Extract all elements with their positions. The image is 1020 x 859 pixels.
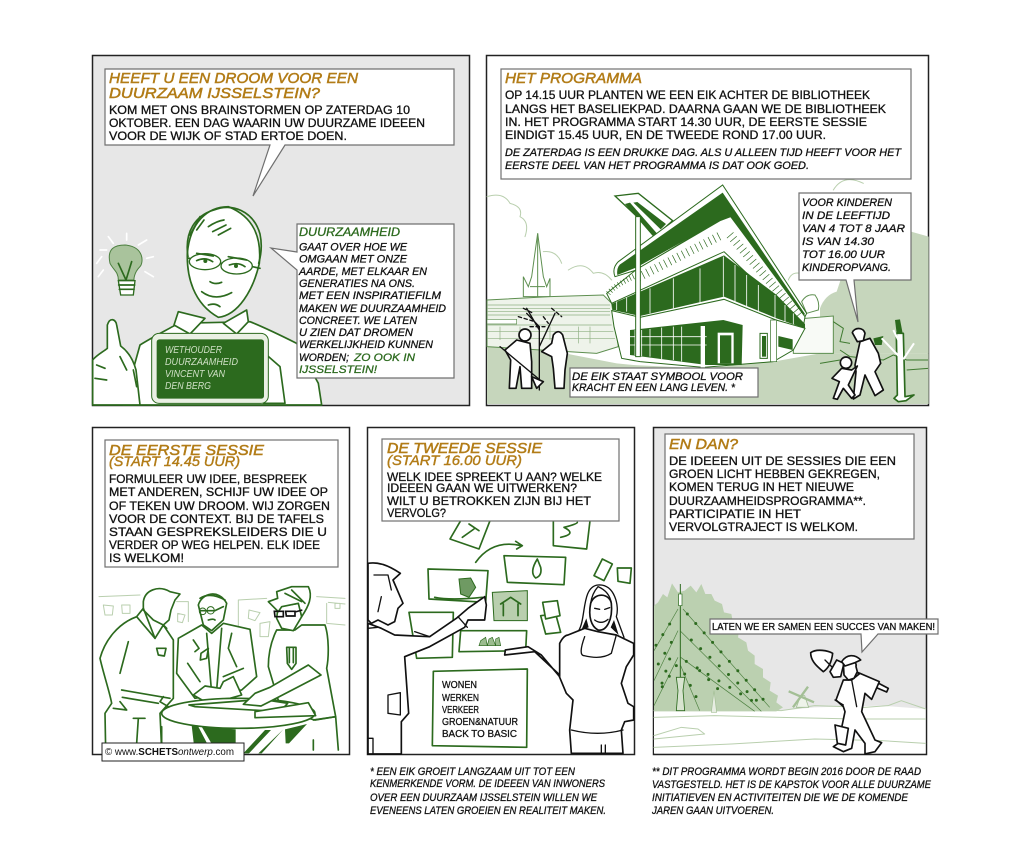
credit: schetsontwerp xyxy=(102,743,244,761)
speech bubble: programma xyxy=(501,69,911,179)
text: eik symbool xyxy=(572,371,743,394)
text: eik symbool: KRACHT EN EEN LANG LEVEN. * xyxy=(572,382,736,394)
text: kinderopvang: IN DE LEEFTIJD xyxy=(802,210,890,222)
planted oak tree xyxy=(518,308,562,390)
heading: de tweede sessie: (START 16.00 UUR) xyxy=(387,453,522,468)
people planting tree xyxy=(500,329,567,388)
text: en dan body: DUURZAAMHEIDSPROGRAMMA**. xyxy=(669,494,866,508)
text: en dan body: DE IDEEEN UIT DE SESSIES DIE EEN xyxy=(669,454,896,468)
list: themes: BACK TO BASIC xyxy=(442,728,517,740)
list: themes: WERKEN xyxy=(442,692,479,704)
text: kinderopvang xyxy=(802,197,905,274)
text: programma body: IN. HET PROGRAMMA START 14.30 UUR, DE EERSTE SESSIE xyxy=(505,115,867,129)
church xyxy=(523,233,550,297)
tablet label: wethouder: DEN BERG xyxy=(165,380,211,392)
text: invitation xyxy=(109,103,425,143)
illustration: pointing man xyxy=(368,563,486,754)
speech bubble: tweede sessie xyxy=(382,439,619,521)
text: kinderopvang: VOOR KINDEREN xyxy=(802,197,892,209)
illustration: three people around a table xyxy=(99,587,345,753)
speech bubble: samen een succes xyxy=(710,619,938,652)
text: en dan body: GROEN LICHT HEBBEN GEKREGEN, xyxy=(669,467,880,481)
text: eerste sessie body: MET ANDEREN, SCHIJF UW IDEE OP xyxy=(109,485,328,499)
text: duurzaamheid definition: MET EEN INSPIRATIEFILM xyxy=(299,290,442,302)
text: duurzaamheid definition: WORDEN; xyxy=(299,352,349,364)
heading: heeft u een droom: HEEFT U EEN DROOM VOOR EEN xyxy=(109,70,358,87)
list: themes: GROEN&NATUUR xyxy=(442,716,518,728)
library roof xyxy=(614,185,807,320)
text: invitation: KOM MET ONS BRAINSTORMEN OP ZATERDAG 10 xyxy=(109,103,410,117)
text: duurzaamheid definition: CONCREET. WE LATEN xyxy=(299,315,417,327)
text: en dan body xyxy=(669,454,896,534)
heading: de eerste sessie: (START 14.45 UUR) xyxy=(109,454,240,469)
illustration: woman presenting xyxy=(505,585,634,753)
text: eerste sessie body: IS WELKOM! xyxy=(109,551,184,565)
panel: heeft u een droom xyxy=(92,56,470,406)
speech bubble: invitation xyxy=(105,69,454,196)
text: kinderopvang: KINDEROPVANG. xyxy=(802,262,891,274)
text: duurzaamheid definition xyxy=(298,227,446,376)
panel: en dan xyxy=(654,428,938,754)
text: tweede sessie body: WILT U BETROKKEN ZIJN BIJ HET xyxy=(387,494,592,508)
tablet label: wethouder: DUURZAAMHEID xyxy=(165,356,238,368)
footnote: eik: KENMERKENDE VORM. DE IDEEEN VAN INWONERS xyxy=(370,778,606,790)
text: duurzaamheid definition: WERKELIJKHEID KUNNEN xyxy=(299,339,433,351)
text: duurzaamheid definition: ZO OOK IN xyxy=(353,352,415,364)
footnote: duurzaamheidsprogramma: VASTGESTELD. HET IS DE KAPSTOK VOOR ALLE DUURZAME xyxy=(652,779,932,791)
text: eerste sessie body: VOOR DE CONTEXT. BIJ DE TAFELS xyxy=(109,512,324,526)
text: duurzaamheid definition: OMGAAN MET ONZE xyxy=(299,254,408,266)
heading: de tweede sessie: DE TWEEDE SESSIE xyxy=(387,440,543,457)
speech bubble: duurzaamheid xyxy=(271,224,454,378)
text: programma body: EERSTE DEEL VAN HET PROGRAMMA IS DAT OOK GOED. xyxy=(505,160,809,172)
rear building and trees xyxy=(793,295,833,353)
text: programma body xyxy=(505,88,902,172)
tablet label: wethouder: WETHOUDER xyxy=(165,344,222,356)
text: eerste sessie body xyxy=(109,472,330,565)
library lower windows xyxy=(630,320,793,367)
text: duurzaamheid definition: U ZIEN DAT DROMEN xyxy=(299,327,413,339)
text: duurzaamheid definition: GENERATIES NA ONS. xyxy=(299,278,415,290)
text: tweede sessie body: VERVOLG? xyxy=(387,506,446,520)
icon: windmill xyxy=(789,687,814,707)
text: en dan body: PARTICIPATIE IN HET xyxy=(669,507,802,521)
icon: light bulb xyxy=(97,233,153,295)
heading: de eerste sessie xyxy=(109,442,265,469)
illustration: walking parent, child and young tree xyxy=(820,319,928,402)
illustration: wall of ideas with two people xyxy=(409,521,631,747)
text: samen een succes: LATEN WE ER SAMEN EEN SUCCES VAN MAKEN! xyxy=(712,621,935,633)
text: eik symbool: DE EIK STAAT SYMBOOL VOOR xyxy=(572,371,743,383)
heading: en dan: EN DAN? xyxy=(669,436,739,453)
footnote: eik xyxy=(370,766,606,817)
heading: de eerste sessie: DE EERSTE SESSIE xyxy=(109,442,265,459)
text: tweede sessie body: IDEEEN GAAN WE UITWERKEN? xyxy=(387,481,577,495)
text: programma body: DE ZATERDAG IS EEN DRUKKE DAG. ALS U ALLEEN TIJD HEEFT VOOR HET xyxy=(505,147,902,159)
text: tweede sessie body xyxy=(387,470,602,520)
text: programma body: LANGS HET BASELIEKPAD. DAARNA GAAN WE DE BIBLIOTHEEK xyxy=(505,102,886,116)
panel: het programma xyxy=(486,56,929,406)
panel: de eerste sessie xyxy=(92,428,350,761)
footnote: eik: * EEN EIK GROEIT LANGZAAM UIT TOT EEN xyxy=(370,766,575,778)
illustration: landscape with growing tree xyxy=(654,583,926,753)
text: programma body: OP 14.15 UUR PLANTEN WE EEN EIK ACHTER DE BIBLIOTHEEK xyxy=(505,88,870,102)
tablet label: wethouder: VINCENT VAN xyxy=(165,368,225,380)
list: themes xyxy=(442,679,518,740)
tablet label: wethouder xyxy=(165,344,238,392)
list: themes: WONEN xyxy=(442,679,477,691)
heading: de tweede sessie xyxy=(387,440,543,468)
text: tweede sessie body: WELK IDEE SPREEKT U AAN? WELKE xyxy=(387,470,602,484)
lamp post xyxy=(636,217,640,357)
footnote: duurzaamheidsprogramma xyxy=(651,766,932,817)
illustration: tree branch lights xyxy=(654,584,770,712)
text: invitation: OKTOBER. EEN DAG WAARIN UW DUURZAME IDEEEN xyxy=(109,116,425,130)
text: programma body: EINDIGT 15.45 UUR, EN DE TWEEDE ROND 17.00 UUR. xyxy=(505,128,826,142)
library fin xyxy=(615,193,673,237)
text: kinderopvang: IS VAN 14.30 xyxy=(802,236,875,248)
speech bubble: en dan xyxy=(665,434,914,539)
heading: heeft u een droom xyxy=(109,70,358,102)
text: en dan body: VERVOLGTRAJECT IS WELKOM. xyxy=(669,520,858,534)
speech bubble: eerste sessie xyxy=(105,440,338,567)
illustration: library scene xyxy=(487,180,929,404)
text: eerste sessie body: FORMULEER UW IDEE, BESPREEK xyxy=(109,472,307,486)
text: en dan body: KOMEN TERUG IN HET NIEUWE xyxy=(669,480,854,494)
heading: het programma: HET PROGRAMMA xyxy=(505,70,642,87)
speech bubble: kinderen xyxy=(799,193,911,322)
panel: de tweede sessie xyxy=(368,428,634,754)
library window band xyxy=(612,251,805,328)
text: eerste sessie body: STAAN GESPREKSLEIDERS DIE U xyxy=(109,525,327,539)
caption box: eik symbool xyxy=(570,368,758,397)
library ribbed facade xyxy=(607,217,805,327)
footnote: duurzaamheidsprogramma: INITIATIEVEN EN ACTIVITEITEN DIE WE DE KOMENDE xyxy=(652,792,909,804)
illustration: farmer with spade xyxy=(811,650,888,754)
illustration: alderman with tablet xyxy=(93,207,322,405)
credit: schetsontwerp: © www.SCHETSontwerp.com xyxy=(105,747,234,758)
text: invitation: VOOR DE WIJK OF STAD ERTOE DOEN. xyxy=(109,129,347,143)
list: themes: VERKEER xyxy=(442,704,479,716)
footnote: duurzaamheidsprogramma: JAREN GAAN UITVOEREN. xyxy=(651,805,774,817)
heading: heeft u een droom: DUURZAAM IJSSELSTEIN? xyxy=(109,85,321,102)
text: eerste sessie body: VERDER OP WEG HELPEN. ELK IDEE xyxy=(109,538,320,552)
text: eerste sessie body: OF TEKEN UW DROOM. WIJ ZORGEN xyxy=(109,499,330,513)
footnote: eik: OVER EEN DUURZAAM IJSSELSTEIN WILLEN WE xyxy=(370,792,598,804)
text: duurzaamheid definition: AARDE, MET ELKAAR EN xyxy=(298,266,427,278)
text: kinderopvang: TOT 16.00 UUR xyxy=(802,249,885,261)
library lower storey xyxy=(612,299,805,367)
footnote: eik: EVENEENS LATEN GROEIEN EN REALITEIT MAKEN. xyxy=(370,805,606,817)
text: duurzaamheid definition: GAAT OVER HOE WE xyxy=(299,242,408,254)
side building xyxy=(487,295,618,353)
text: duurzaamheid definition: DUURZAAMHEID xyxy=(299,227,400,239)
text: duurzaamheid definition: MAKEN WE DUURZAAMHEID xyxy=(299,303,446,315)
text: kinderopvang: VAN 4 TOT 8 JAAR xyxy=(802,223,905,235)
footnote: duurzaamheidsprogramma: ** DIT PROGRAMMA WORDT BEGIN 2016 DOOR DE RAAD xyxy=(652,766,921,778)
text: duurzaamheid definition: IJSSELSTEIN! xyxy=(299,364,377,376)
